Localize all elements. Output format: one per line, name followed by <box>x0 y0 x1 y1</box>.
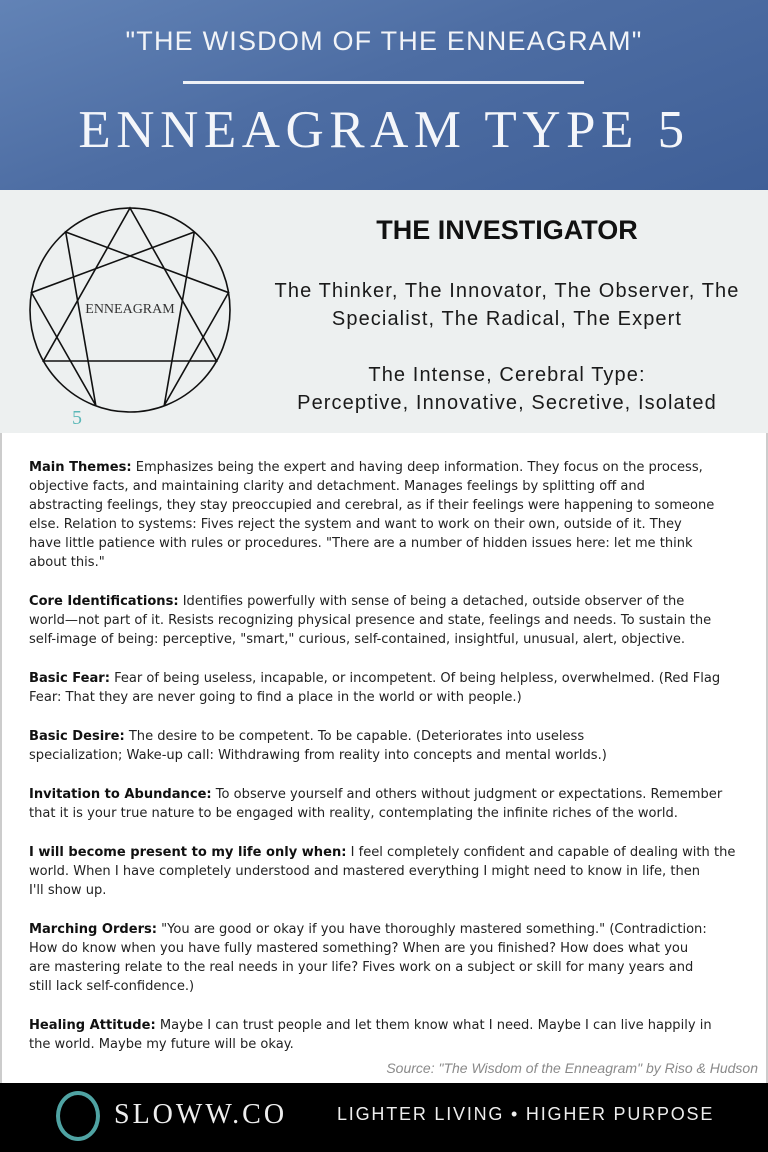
text: type description <box>297 364 717 414</box>
text: core identifications: self-image of being: perceptive, "smart," curious, self-contained, insightful, unusual, alert, objective. <box>29 632 685 647</box>
text: marching orders: still lack self-confidence.) <box>29 979 194 994</box>
text: type description: The Intense, Cerebral Type: <box>368 364 646 386</box>
text: main themes: else. Relation to systems: Fives reject the system and want to work on their own, outside of it. They <box>29 517 682 532</box>
text: core identifications: Core Identifications: Identifies powerfully with sense of being a detached, outside observer of the <box>29 594 684 609</box>
text: present to my life: I will become present to my life only when: I feel completely confident and capable of dealing with the <box>29 845 735 860</box>
icon: teal ring logo <box>56 1091 100 1141</box>
text: source: Source: "The Wisdom of the Enneagram" by Riso & Hudson <box>386 1060 758 1076</box>
main title: ENNEAGRAM TYPE 5 <box>78 101 690 159</box>
text: alternate names: The Thinker, The Innovator, The Observer, The <box>275 280 739 302</box>
text: main themes: about this." <box>29 555 105 570</box>
text: marching orders: Marching Orders: "You are good or okay if you have thoroughly mastered something." (Contradiction: <box>29 922 707 937</box>
text: healing attitude: Healing Attitude: Maybe I can trust people and let them know what I need. Maybe I can live happily in <box>29 1018 712 1033</box>
text: present to my life <box>29 845 735 898</box>
text: alternate names <box>274 280 739 330</box>
text: brand: SLOWW.CO <box>114 1099 287 1130</box>
text: healing attitude: the world. Maybe my future will be okay. <box>29 1037 294 1052</box>
heading: the investigator: THE INVESTIGATOR <box>376 215 638 245</box>
text: invitation to abundance: Invitation to Abundance: To observe yourself and others without judgment or expectations. Remember <box>29 787 722 802</box>
subtitle: book name: "THE WISDOM OF THE ENNEAGRAM" <box>126 26 642 56</box>
text: core identifications: world—not part of it. Resists recognizing physical presence and state, feelings and needs. To sustain the <box>29 613 711 628</box>
text: basic fear: Basic Fear: Fear of being useless, incapable, or incompetent. Of being helpless, overwhelmed. (Red Flag <box>29 671 720 686</box>
text: main themes <box>29 460 714 570</box>
icon: enneagram diagram: ENNEAGRAM <box>85 302 175 317</box>
text: invitation to abundance <box>29 787 722 821</box>
text: tagline: LIGHTER LIVING • HIGHER PURPOSE <box>337 1104 714 1124</box>
text: basic fear: Fear: That they are never going to find a place in the world or with people.) <box>29 690 522 705</box>
text: present to my life: I'll show up. <box>29 883 106 898</box>
text: basic desire: specialization; Wake-up call: Withdrawing from reality into concepts and mental worlds.) <box>29 748 607 763</box>
text: core identifications <box>29 594 711 647</box>
text: main themes: Main Themes: Emphasizes being the expert and having deep information. They focus on the process, <box>29 460 703 475</box>
text: invitation to abundance: that it is your true nature to be engaged with reality, contemplating the infinite riches of the world. <box>29 806 678 821</box>
icon: enneagram diagram <box>29 206 231 429</box>
text: basic desire: Basic Desire: The desire to be competent. To be capable. (Deteriorates into useless <box>29 729 584 744</box>
text: present to my life: world. When I have completely understood and mastered everything I might need to know in life, then <box>29 864 700 879</box>
icon: enneagram diagram: 5 <box>72 407 82 429</box>
text: main themes: abstracting feelings, they stay preoccupied and cerebral, as if their feelings were happening to someone <box>29 498 714 513</box>
text: marching orders: are mastering relate to the real needs in your life? Fives work on a subject or skill for many years and <box>29 960 693 975</box>
text: marching orders: How do know when you have fully mastered something? When are you finished? How does what you <box>29 941 688 956</box>
text: basic fear <box>29 671 720 705</box>
text: type description: Perceptive, Innovative, Secretive, Isolated <box>297 392 717 414</box>
footer <box>0 1083 768 1152</box>
text: main themes: objective facts, and maintaining clarity and detachment. Manages feelings by splitting off and <box>29 479 645 494</box>
text: basic desire <box>29 729 607 763</box>
panel: type summary band <box>0 190 768 433</box>
header banner <box>0 0 768 190</box>
text: healing attitude <box>29 1018 712 1052</box>
text: main themes: have little patience with rules or procedures. "There are a number of hidden issues here: let me think <box>29 536 693 551</box>
panel: body text <box>0 433 768 1083</box>
text: marching orders <box>29 922 707 994</box>
text: alternate names: Specialist, The Radical, The Expert <box>332 308 682 330</box>
